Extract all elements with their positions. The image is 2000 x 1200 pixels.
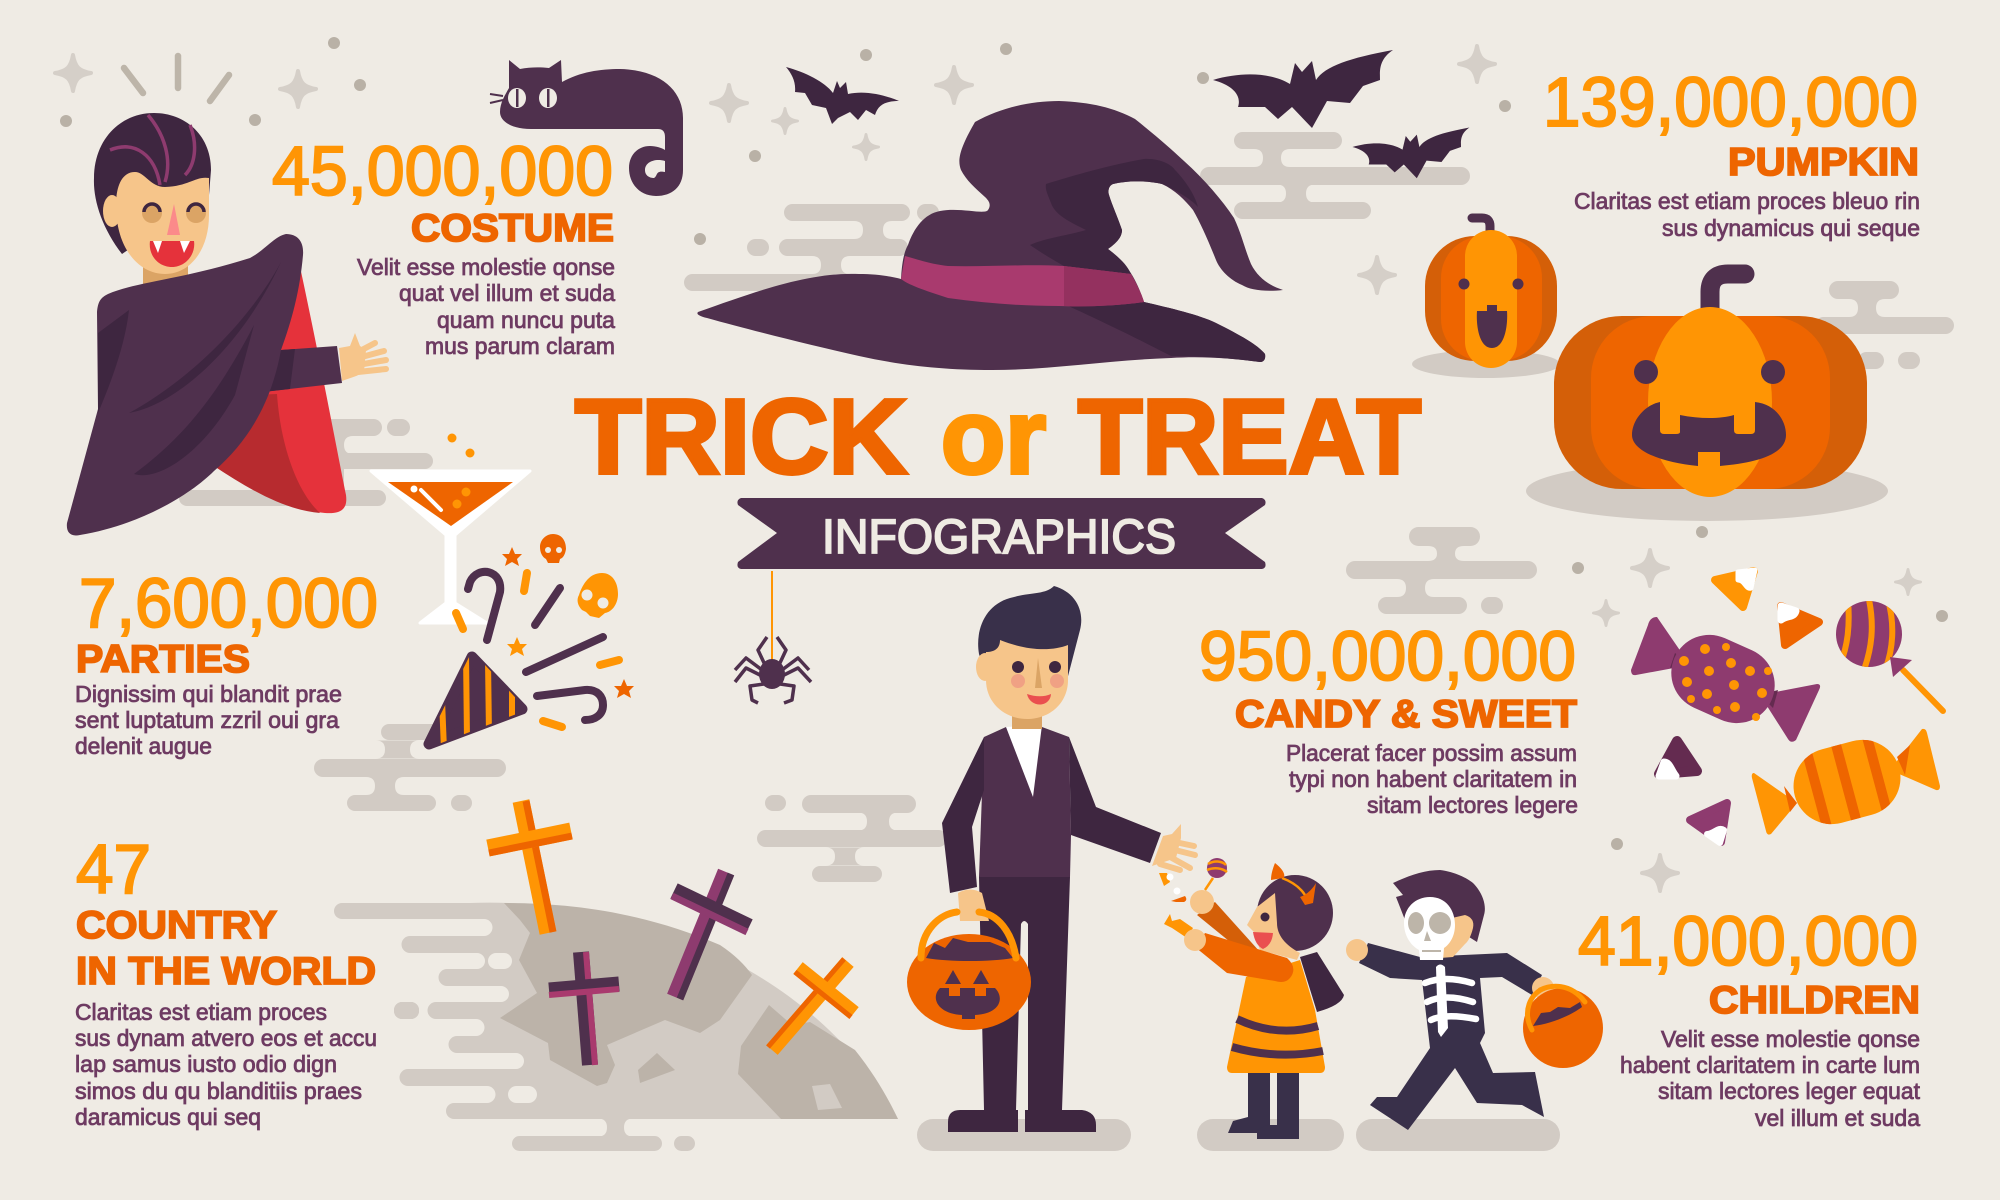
title: TREAT (1078, 378, 1421, 496)
icon: lollipop (1836, 595, 1943, 711)
text block: parties: PARTIES (76, 638, 250, 681)
text block: candy and sweet: Placerat facer possim assum (1286, 740, 1577, 766)
text block: children: Velit esse molestie qonse (1661, 1026, 1920, 1052)
icon: burst rays above vampire (124, 56, 229, 101)
text block: parties: sent luptatum zzril oui gra (75, 707, 339, 733)
text block: country: sus dynam atvero eos et accu (75, 1025, 377, 1051)
icon: small pumpkin basket (1523, 986, 1603, 1068)
sparkle stars and dots (55, 37, 1948, 891)
text block: pumpkin: Claritas est etiam proces bleuo rin (1574, 188, 1920, 214)
text block: country: Claritas est etiam proces (75, 999, 327, 1025)
text block: children: CHILDREN (1709, 979, 1920, 1022)
icon: striped candy (1752, 729, 1940, 835)
text block: children: vel illum et suda (1755, 1105, 1920, 1131)
icon: orange cross (488, 801, 572, 933)
icon: small pumpkin (1412, 218, 1560, 378)
ground shadows (917, 1119, 1560, 1151)
icon: bat left (786, 67, 899, 124)
text block: candy and sweet (1199, 617, 1578, 818)
icon: bat large (1213, 50, 1393, 128)
icon: polka dot candy (1631, 617, 1820, 742)
icon: skull large (578, 573, 618, 618)
icon: skeleton boy (1346, 870, 1603, 1130)
icon: falling sweets (1159, 858, 1227, 938)
text block: costume: COSTUME (411, 207, 614, 250)
icon: candy corn (1659, 570, 1819, 843)
icon: big pumpkin (1526, 274, 1888, 521)
icon: dark cross (549, 952, 619, 1065)
text block: candy and sweet: CANDY & SWEET (1235, 693, 1577, 736)
icon: girl (1184, 863, 1344, 1139)
icon: graveyard globe (334, 801, 898, 1151)
text block: candy and sweet: sitam lectores legere (1367, 792, 1578, 818)
text block: country: simos du qu blanditiis praes (75, 1078, 362, 1104)
icon: party popper (429, 534, 634, 750)
text block: children (1578, 902, 1921, 1131)
text block: children: sitam lectores leger equat (1658, 1078, 1921, 1104)
text block: costume (272, 132, 615, 359)
text block: parties: Dignissim qui blandit prae (75, 681, 342, 707)
text block: costume: 45,000,000 (272, 132, 613, 210)
text block: country: daramicus qui seq (75, 1104, 261, 1130)
icon: man (907, 586, 1195, 1132)
text block: parties: delenit augue (75, 733, 212, 759)
icon: skull small (540, 534, 566, 563)
text block: country: lap samus iusto odio dign (75, 1051, 337, 1077)
title: TRICK (575, 378, 907, 496)
text block: parties: 7,600,000 (79, 564, 378, 642)
icon: purple cross (672, 872, 749, 999)
text block: costume: quat vel illum et suda (399, 280, 615, 306)
text block: pumpkin (1543, 63, 1920, 241)
icon: pumpkin basket (907, 912, 1031, 1030)
icon: vampire (67, 113, 386, 535)
clouds (179, 132, 1954, 882)
text block: pumpkin: sus dynamicus qui seque (1662, 215, 1920, 241)
text block: pumpkin: PUMPKIN (1728, 141, 1919, 184)
banner: infographics (737, 498, 1266, 569)
text block: costume: mus parum claram (425, 333, 615, 359)
text block: children: 41,000,000 (1578, 902, 1918, 980)
text block: country: COUNTRY (76, 904, 277, 947)
icon: bat small (1352, 128, 1469, 178)
text block: country (75, 830, 377, 1130)
icon: spider (735, 571, 811, 703)
text block: children: habent claritatem in carte lum (1620, 1052, 1920, 1078)
text block: costume: Velit esse molestie qonse (357, 254, 615, 280)
icon: orange tilted cross (768, 959, 854, 1050)
icon: candies (1631, 570, 1943, 843)
title: or (941, 378, 1046, 496)
text block: country: 47 (76, 830, 151, 908)
icon: cocktail glass (371, 434, 530, 623)
banner: infographics: INFOGRAPHICS (822, 511, 1176, 564)
icon: black cat (490, 60, 683, 196)
text block: country: IN THE WORLD (76, 950, 376, 993)
text block: pumpkin: 139,000,000 (1543, 63, 1918, 141)
text block: candy and sweet: 950,000,000 (1199, 617, 1576, 695)
icon: witch hat (697, 101, 1283, 370)
text block: parties (75, 564, 378, 759)
text block: costume: quam nuncu puta (437, 307, 615, 333)
text block: candy and sweet: typi non habent claritatem in (1289, 766, 1577, 792)
title (575, 378, 1421, 496)
